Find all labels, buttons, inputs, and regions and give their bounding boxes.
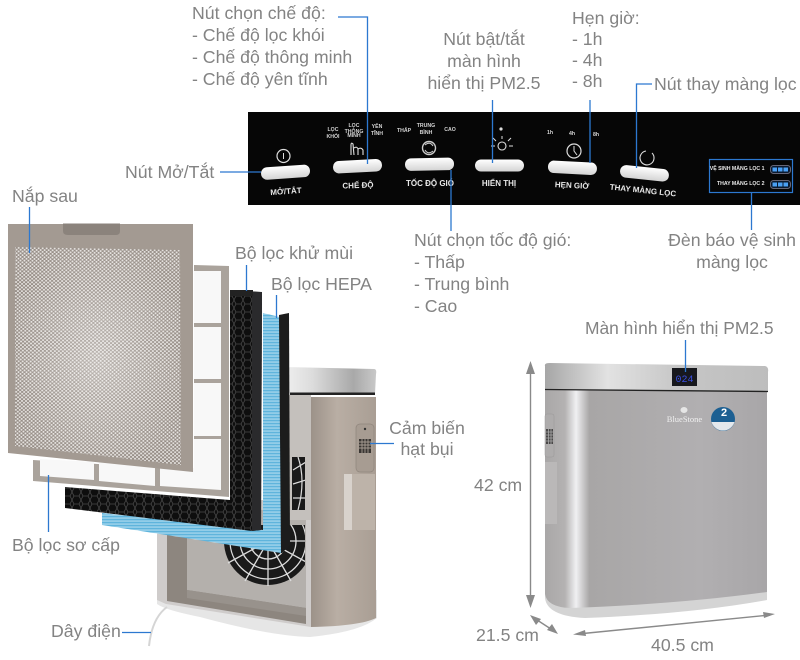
- PM2.5 display: 024: [675, 375, 694, 386]
- label: depth: 21.5 cm: [476, 625, 539, 645]
- timer button: 4h: [569, 131, 575, 137]
- fan speed button: TỐC ĐỘ GIÓ: [406, 178, 454, 188]
- timer button: [547, 130, 599, 191]
- label: dust sensor: hạt bụi: [400, 439, 454, 459]
- power button: MỞ/TẮT: [270, 186, 302, 197]
- label: mode button: - Chế độ yên tĩnh: [192, 69, 328, 89]
- label: display button: Nút bật/tắt: [443, 29, 525, 49]
- BlueStone logo: BlueStone: [667, 414, 702, 424]
- label: HEPA filter: Bộ lọc HEPA: [271, 274, 372, 294]
- label: fan speed: - Thấp: [414, 252, 465, 272]
- BlueStone logo: [667, 407, 702, 424]
- label: filter indicator: Đèn báo vệ sinh: [668, 230, 796, 250]
- fan speed button: CAO: [444, 127, 456, 133]
- timer button: 1h: [547, 130, 553, 136]
- filter indicator box: [710, 160, 792, 192]
- warranty sticker: 2: [721, 407, 727, 419]
- mode button: KHÓI: [327, 132, 340, 140]
- warranty sticker: [711, 407, 735, 431]
- label: timer: Hẹn giờ:: [572, 8, 640, 28]
- top cap: [545, 363, 768, 391]
- filter indicator box: VỆ SINH MÀNG LỌC 1: [710, 164, 765, 172]
- label: fan speed: - Cao: [414, 296, 457, 316]
- display button: HIỂN THỊ: [482, 179, 516, 188]
- body: [545, 390, 767, 608]
- white base: [157, 590, 377, 637]
- dimension arrow: width: [573, 612, 775, 636]
- mode button: LỌC: [349, 123, 360, 129]
- HEPA filter: [102, 313, 290, 553]
- PM2.5 display: [672, 368, 697, 386]
- replace filter button: [609, 151, 677, 198]
- mode button: YÊN: [372, 122, 383, 130]
- label: dust sensor: Cảm biến: [389, 418, 465, 438]
- label: display button: màn hình: [447, 51, 521, 71]
- power cord: [149, 607, 167, 646]
- dimension arrow: depth: [530, 615, 558, 634]
- power button: [261, 150, 310, 197]
- fan speed button: TRUNG: [417, 123, 435, 129]
- filter indicator box: THAY MÀNG LỌC 2: [717, 180, 765, 187]
- label: fan speed: - Trung bình: [414, 274, 509, 294]
- label: filter indicator: màng lọc: [696, 252, 768, 272]
- fan: [224, 525, 305, 586]
- label: fan speed: Nút chọn tốc độ gió:: [414, 230, 571, 250]
- mode button: LỌC: [328, 127, 339, 133]
- side sensor: [545, 414, 557, 524]
- replace filter button: THAY MÀNG LỌC: [609, 183, 677, 198]
- carbon filter: [65, 290, 262, 531]
- inner housing: [157, 500, 311, 627]
- label: replace filter: Nút thay màng lọc: [654, 74, 797, 94]
- label: timer: - 4h: [572, 50, 602, 70]
- fan speed button: [397, 123, 456, 188]
- label: timer: - 8h: [572, 71, 602, 91]
- label: timer: - 1h: [572, 29, 602, 49]
- base: [545, 585, 767, 618]
- mode button: [327, 122, 383, 191]
- spec label: [344, 474, 352, 530]
- fan upper: [292, 457, 305, 510]
- label: display button: hiển thị PM2.5: [427, 73, 541, 93]
- fan speed button: THẤP: [397, 127, 412, 134]
- primary filter: [33, 265, 229, 497]
- mode button: CHẾ ĐỘ: [342, 179, 374, 191]
- taupe side panel: [311, 397, 376, 627]
- dimension arrow: height: [526, 361, 535, 608]
- dust sensor: [356, 424, 374, 472]
- mode button: TĨNH: [371, 130, 383, 137]
- control panel: [248, 112, 800, 205]
- label: power: Nút Mở/Tắt: [125, 161, 214, 182]
- front view of purifier: [545, 363, 768, 618]
- label: mode button: Nút chọn chế độ:: [192, 3, 326, 23]
- label: primary filter: Bộ lọc sơ cấp: [12, 535, 120, 555]
- top cap: [285, 367, 376, 394]
- back cover: [8, 224, 193, 472]
- label: PM2.5 display: Màn hình hiển thị PM2.5: [585, 318, 774, 338]
- timer button: 8h: [593, 132, 599, 138]
- label: power cord: Dây điện: [51, 621, 121, 641]
- mode button: MINH: [347, 133, 361, 139]
- label: height: 42 cm: [474, 475, 522, 495]
- timer button: HẸN GIỜ: [555, 180, 590, 191]
- mode button: THÔNG: [345, 127, 363, 135]
- display button: [475, 127, 524, 188]
- label: width: 40.5 cm: [651, 635, 714, 655]
- fan speed button: BÌNH: [420, 128, 433, 136]
- label: mode button: - Chế độ lọc khói: [192, 25, 325, 45]
- label: back cover: Nắp sau: [12, 185, 78, 206]
- label: carbon filter: Bộ lọc khử mùi: [235, 243, 353, 263]
- air purifier rear body: [149, 367, 377, 646]
- label: mode button: - Chế độ thông minh: [192, 47, 352, 67]
